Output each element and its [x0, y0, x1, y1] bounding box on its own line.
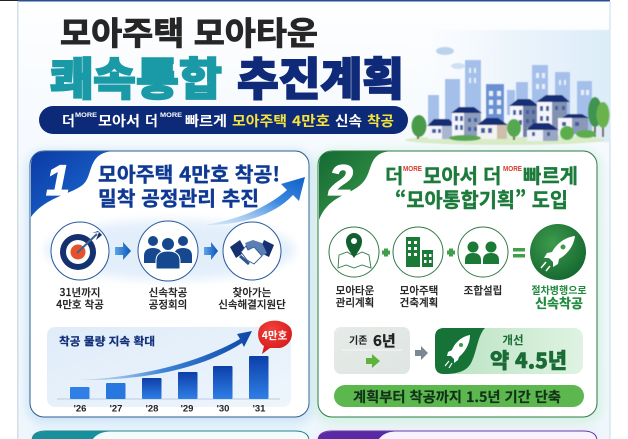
result label	[531, 282, 587, 312]
chart heading: 착공 물량 지속 확대	[59, 333, 155, 349]
arrow	[415, 346, 428, 360]
bar chart: '26	[74, 404, 86, 414]
icon: map pin	[329, 227, 379, 277]
bar chart: '31	[253, 404, 266, 414]
panel 2: 모아통합기획	[314, 150, 602, 424]
panel 2 heading: MORE	[403, 166, 422, 173]
icon: rocket	[530, 224, 586, 280]
step labels: 신속해결지원단	[218, 297, 286, 312]
after box: 개선 약 4.5년: 약 4.5년	[490, 345, 567, 375]
panel 1: 4만호 착공	[26, 150, 314, 424]
panel 2 number badge: 2	[328, 157, 353, 205]
panel 3: cropped teal panel	[32, 431, 309, 439]
icon: handshake	[223, 222, 281, 280]
step labels: 찾아가는	[233, 285, 272, 300]
result label: 절차병행으로	[531, 282, 587, 297]
step labels: 신속착공	[149, 285, 188, 300]
bar chart: '27	[110, 404, 122, 414]
subtitle pill: MORE	[160, 112, 183, 119]
after box: 개선 약 4.5년	[435, 328, 583, 375]
after box: 개선 약 4.5년: 개선	[502, 332, 524, 348]
before box: 기존 6년: 기존	[349, 332, 367, 347]
trend arrow	[75, 331, 252, 380]
callout: 4만호	[258, 321, 292, 354]
bar chart: '29	[181, 404, 193, 414]
bar chart: '30	[217, 404, 229, 414]
before box: 기존 6년: 6년	[373, 330, 396, 351]
title line 2: 쾌속통합	[50, 43, 222, 108]
callout: 4만호: 4만호	[262, 328, 288, 343]
step labels	[56, 285, 286, 312]
subtitle pill	[39, 106, 408, 134]
step labels: 4만호 착공	[56, 297, 104, 312]
equals sign	[513, 248, 525, 258]
summary pill: 계획부터 착공까지 1.5년 기간 단축	[353, 387, 561, 407]
plan labels: 건축계획	[400, 295, 438, 310]
subtitle pill: 착공	[367, 111, 394, 131]
arrow	[115, 242, 131, 260]
icon: target	[51, 222, 109, 280]
plan labels: 관리계획	[336, 295, 374, 310]
plus	[382, 248, 390, 256]
result label: 신속착공	[535, 293, 583, 312]
subtitle pill: 더	[145, 111, 158, 131]
plan labels: 모아주택	[400, 283, 438, 298]
panel 2 heading: 더	[385, 160, 403, 189]
icon: buildings	[393, 227, 443, 277]
step labels: 31년까지	[60, 285, 100, 300]
panel 1 heading: 밀착 공정관리 추진	[98, 182, 259, 212]
panel 2 heading: 빠르게	[523, 160, 578, 189]
plan labels	[336, 283, 502, 310]
step labels: 공정회의	[149, 297, 187, 312]
bar chart: '28	[146, 404, 158, 414]
title line 2: 추진계획	[237, 43, 404, 108]
panel 1 number badge	[31, 152, 110, 217]
before box: 기존 6년	[334, 327, 410, 374]
subtitle pill: 빠르게	[185, 111, 227, 131]
subtitle pill: 더	[62, 111, 75, 131]
panel 2 heading: 더	[483, 160, 501, 189]
title line 2	[50, 43, 404, 108]
panel 2 heading: MORE	[503, 166, 522, 173]
panel 2 number badge	[319, 152, 388, 220]
panel 4: cropped purple panel	[318, 431, 597, 439]
subtitle pill: 신속	[335, 111, 362, 131]
subtitle pill: 모아주택	[232, 111, 287, 131]
arrow	[204, 242, 218, 260]
panel 1 heading	[98, 158, 280, 212]
panel 2 heading: “모아통합기획” 도입	[395, 184, 568, 213]
subtitle pill: MORE	[75, 112, 98, 119]
icon: two people	[458, 227, 508, 277]
rising arrow	[205, 177, 305, 225]
panel 1 heading: 모아주택 4만호 착공!	[98, 158, 280, 188]
icon: people	[138, 221, 198, 281]
plan labels: 모아타운	[336, 283, 375, 298]
illustration: city skyline and houses	[400, 30, 610, 145]
panel 2 heading	[385, 160, 578, 213]
plan labels: 조합설립	[464, 283, 502, 298]
subtitle pill: 모아서	[98, 111, 140, 131]
panel 1 number badge: 1	[46, 157, 70, 205]
plus	[447, 248, 455, 256]
title line 1: 모아주택 모아타운	[60, 8, 318, 54]
bar chart	[47, 321, 292, 414]
panel 2 heading: 모아서	[423, 160, 478, 189]
subtitle pill: 4만호	[292, 111, 330, 131]
